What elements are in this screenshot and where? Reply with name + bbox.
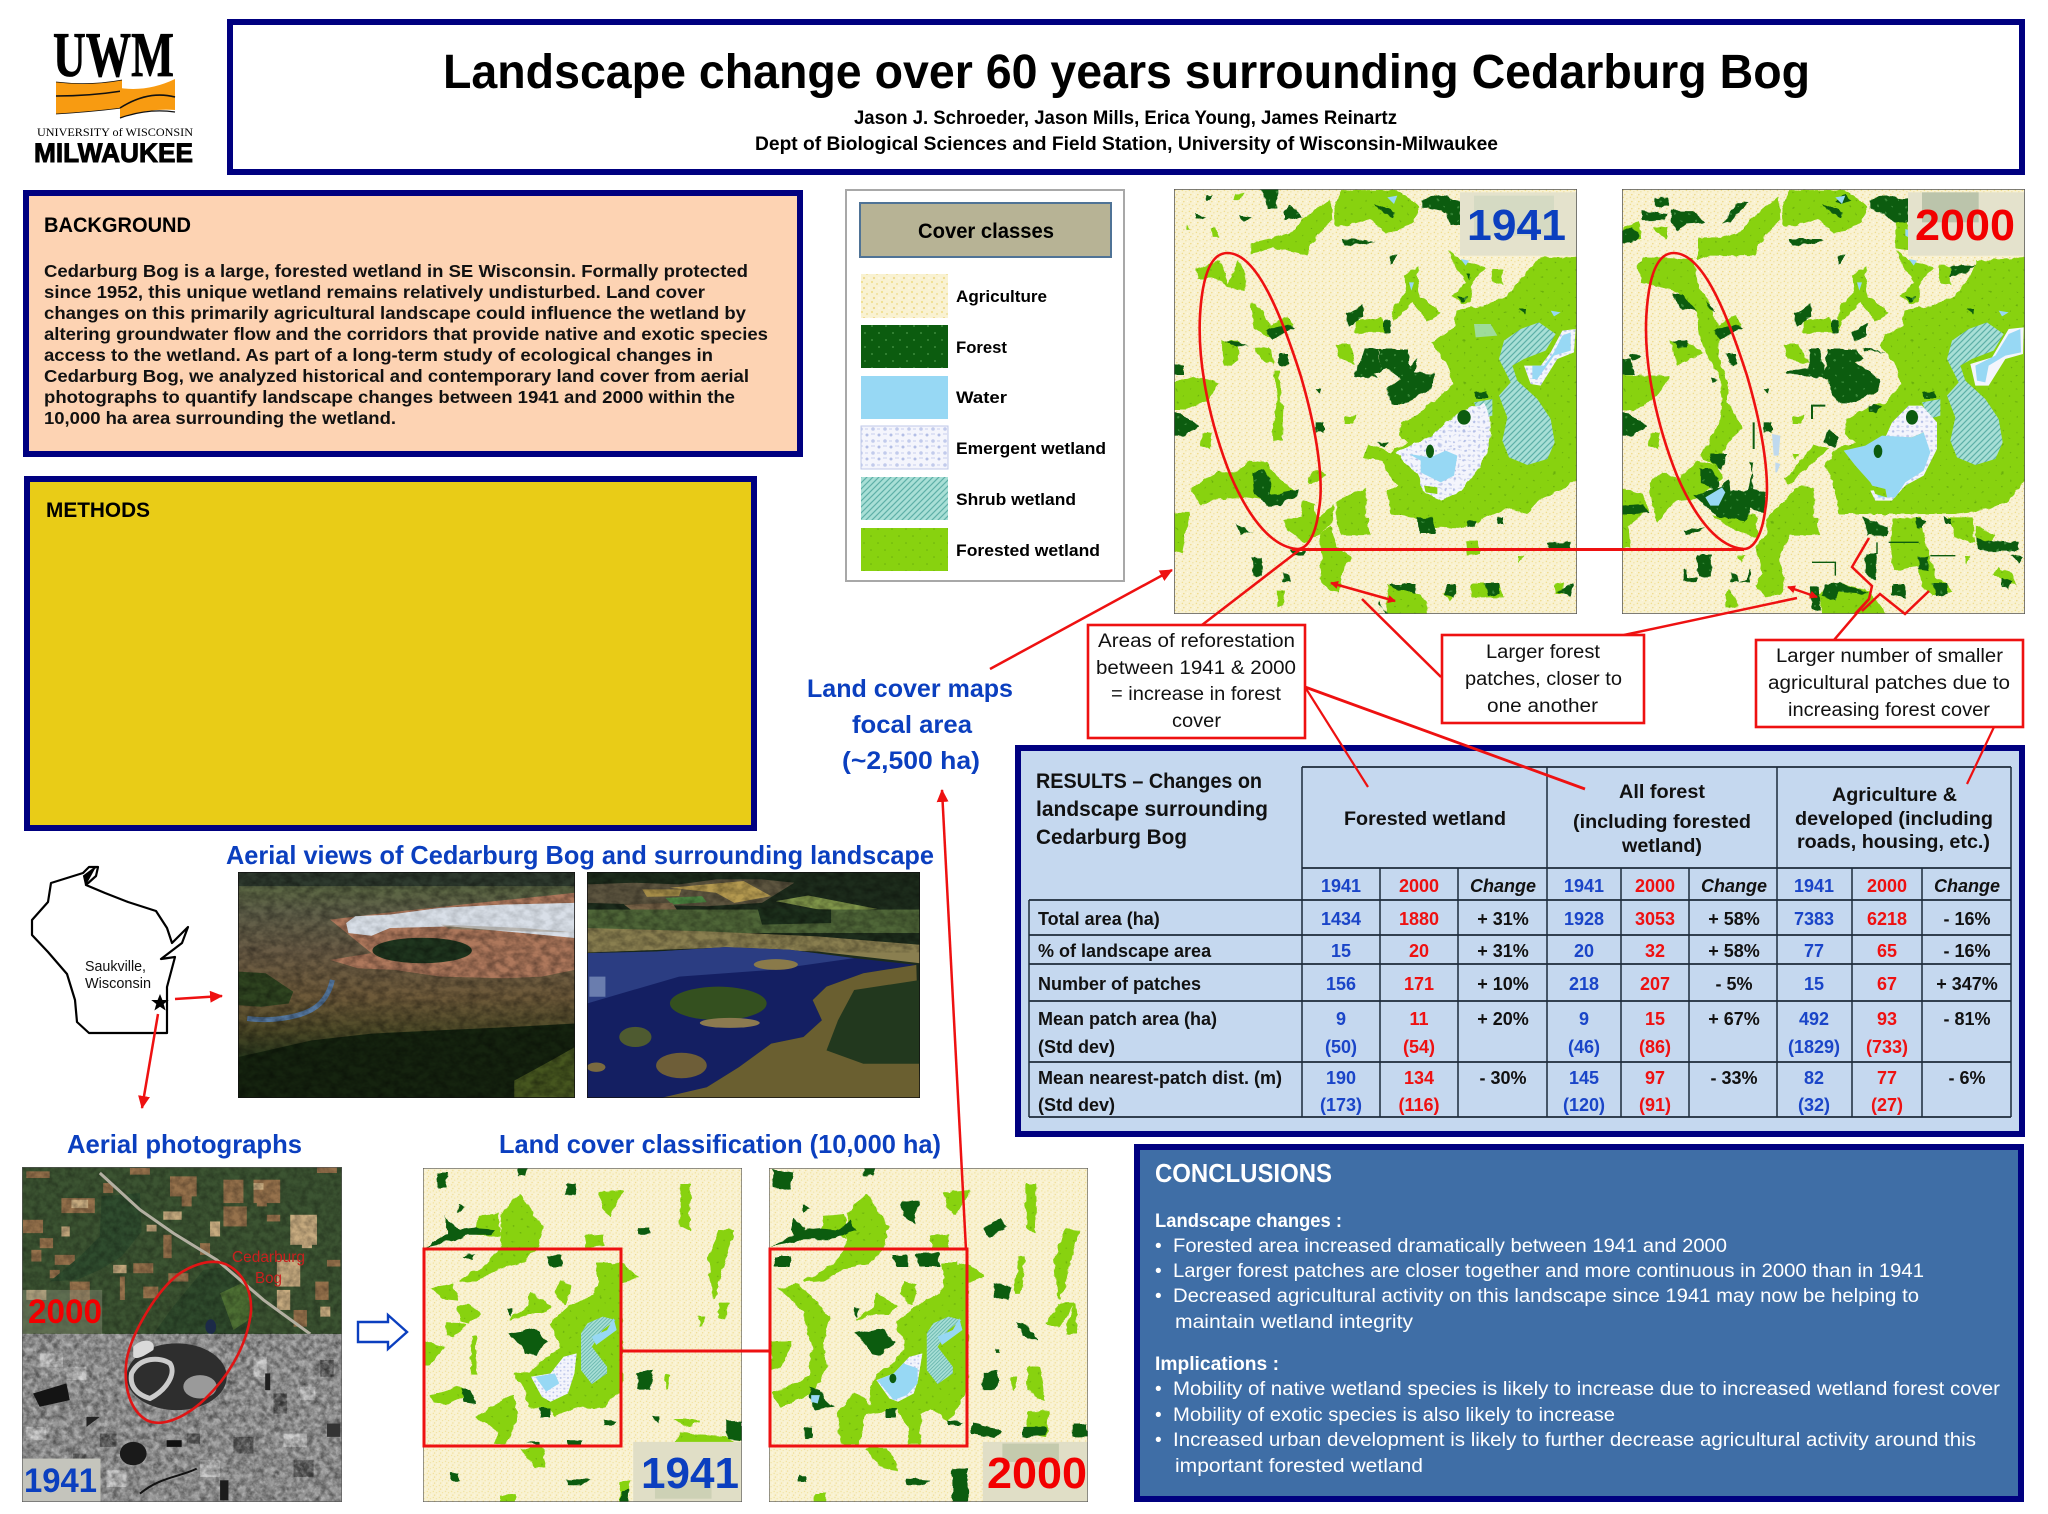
- small map: classification 1941: [423, 1168, 742, 1502]
- leader: forest callout to 1941 map: [1362, 599, 1441, 677]
- map: focal area 2000: [1620, 189, 2027, 616]
- callout: smaller agricultural patches: agricultural patches due to: [1768, 673, 2010, 694]
- row: total area: 1880: [1399, 909, 1439, 929]
- row: percent of landscape: 77: [1804, 941, 1824, 961]
- heading: land cover classification: Land cover classification (10,000 ha): [499, 1129, 941, 1159]
- background body text: photographs to quantify landscape changes between 1941 and 2000 within the: [44, 387, 735, 407]
- row: mean nearest-patch distance: - 33%: [1710, 1068, 1758, 1088]
- row: percent of landscape: 32: [1645, 941, 1665, 961]
- logo: UWM: UNIVERSITY of WISCONSIN: [37, 125, 193, 139]
- Cedarburg Bog label: Cedarburg: [232, 1249, 305, 1266]
- Wisconsin locator map: [32, 867, 188, 1033]
- row: percent of landscape: - 16%: [1943, 941, 1991, 961]
- landscape changes text: •: [1155, 1236, 1162, 1257]
- photo: aerial view 1: [238, 872, 575, 1098]
- affiliation: Dept of Biological Sciences and Field Station, University of Wisconsin-Milwaukee: [755, 134, 1498, 155]
- row: mean patch area: (Std dev): [1038, 1037, 1115, 1057]
- arrow: map to aerial views: [175, 996, 222, 999]
- greyscale 1941 half: [22, 1334, 342, 1502]
- row: mean patch area: 11: [1409, 1009, 1429, 1029]
- year row: 2000: [1635, 876, 1675, 896]
- callout: smaller agricultural patches: increasing forest cover: [1788, 700, 1991, 721]
- swatch: emergent wetland: [861, 426, 1106, 469]
- row: mean nearest-patch distance: (32): [1798, 1095, 1830, 1115]
- year panel: [983, 1442, 1088, 1502]
- authors: Jason J. Schroeder, Jason Mills, Erica Young, James Reinartz: [854, 108, 1397, 129]
- title: Landscape change over 60 years surrounding Cedarburg Bog: [443, 46, 1810, 99]
- landscape changes text: Decreased agricultural activity on this landscape since 1941 may now be helping to: [1173, 1286, 1919, 1307]
- year panel: [22, 1459, 100, 1502]
- row: mean patch area: 9: [1336, 1009, 1346, 1029]
- row: total area: [1038, 909, 1991, 929]
- landscape changes text: [1155, 1211, 1924, 1333]
- callout: larger forest patches: patches, closer to: [1465, 669, 1622, 690]
- Cedarburg Bog label: Bog: [255, 1270, 282, 1287]
- row: number of patches: 171: [1404, 974, 1434, 994]
- column heading: agriculture: Agriculture &: [1832, 785, 1957, 806]
- implications text: Mobility of native wetland species is likely to increase due to increased wetland forest cover: [1173, 1379, 2001, 1400]
- year row: Change: [1934, 876, 2000, 896]
- row: number of patches: 207: [1640, 974, 1670, 994]
- implications text: [1155, 1354, 2001, 1477]
- row: mean nearest-patch distance: 190: [1326, 1068, 1356, 1088]
- table grid: [1029, 767, 2011, 1117]
- year label 1941: 1941: [641, 1449, 739, 1498]
- swatch: shrub wetland: [861, 477, 1076, 520]
- location text: Saukville,: [85, 959, 146, 975]
- implications text: Mobility of exotic species is also likely to increase: [1173, 1405, 1615, 1426]
- row: mean patch area: + 67%: [1708, 1009, 1760, 1029]
- row: mean nearest-patch distance: (Std dev): [1038, 1095, 1115, 1115]
- colour 2000 half: [22, 1166, 342, 1334]
- results heading: landscape surrounding: [1036, 798, 1268, 821]
- row: percent of landscape: 20: [1574, 941, 1594, 961]
- leader: forest callout to 2000 map: [1624, 598, 1797, 635]
- legend title: [860, 203, 1111, 257]
- leader: reforestation callout to ellipse: [1202, 548, 1302, 625]
- year row: Change: [1470, 876, 1536, 896]
- swatch: agriculture: Agriculture: [956, 287, 1047, 306]
- background heading: BACKGROUND: [44, 214, 191, 237]
- Cedarburg Bog label: [232, 1249, 305, 1287]
- landscape changes text: •: [1155, 1261, 1162, 1282]
- row: mean nearest-patch distance: 77: [1877, 1068, 1897, 1088]
- ellipse: reforestation 1941: [1200, 253, 1321, 549]
- year label 1941: 1941: [1467, 201, 1566, 250]
- year panel: [1460, 192, 1577, 256]
- year label 2000: 2000: [987, 1449, 1087, 1498]
- ellipse: reforestation 2000: [1646, 253, 1767, 549]
- aerial label 1941: 1941: [24, 1462, 97, 1500]
- methods heading: METHODS: [46, 499, 150, 522]
- callout: larger forest patches: [1442, 635, 1644, 723]
- year row: [1321, 876, 2000, 896]
- swatch: agriculture: [861, 274, 1047, 318]
- row: mean patch area: (54): [1403, 1037, 1435, 1057]
- heading: aerial photographs: Aerial photographs: [67, 1129, 302, 1159]
- row: mean patch area: 15: [1645, 1009, 1665, 1029]
- results heading: [1036, 770, 1268, 849]
- callout: reforestation: = increase in forest: [1111, 684, 1282, 705]
- row: total area: + 31%: [1477, 909, 1529, 929]
- row: mean nearest-patch distance: (27): [1871, 1095, 1903, 1115]
- row: total area: Total area (ha): [1038, 909, 1160, 929]
- swatch: forest: [861, 325, 1007, 368]
- row: number of patches: + 10%: [1477, 974, 1529, 994]
- row: number of patches: 67: [1877, 974, 1897, 994]
- row: mean nearest-patch distance: (116): [1398, 1095, 1440, 1115]
- background body text: [44, 261, 768, 428]
- bog ellipse: [126, 1262, 251, 1423]
- connector between red squares: [621, 1350, 770, 1352]
- row: number of patches: 218: [1569, 974, 1599, 994]
- swatch: forest: Forest: [956, 338, 1007, 357]
- swatch: forested wetland: Forested wetland: [956, 541, 1100, 560]
- row: mean patch area: - 81%: [1943, 1009, 1991, 1029]
- aerial label 2000: 2000: [28, 1293, 102, 1331]
- year row: 1941: [1321, 876, 1361, 896]
- year row: 1941: [1564, 876, 1604, 896]
- row: total area: 6218: [1867, 909, 1907, 929]
- leader: reforestation to all forest column: [1305, 687, 1585, 789]
- row: mean nearest-patch distance: (173): [1320, 1095, 1362, 1115]
- red focal square 2000: [770, 1249, 967, 1446]
- Wisconsin locator map: Wisconsin: [85, 976, 151, 992]
- row: total area: 7383: [1794, 909, 1834, 929]
- callout: reforestation: cover: [1172, 711, 1222, 732]
- panel: conclusions: [1137, 1147, 2021, 1499]
- row: mean patch area: (46): [1568, 1037, 1600, 1057]
- column heading: agriculture: roads, housing, etc.): [1797, 832, 1990, 853]
- column heading: all forest: (including forested: [1573, 812, 1751, 833]
- row: total area: - 16%: [1943, 909, 1991, 929]
- row: mean patch area: Mean patch area (ha): [1038, 1009, 1217, 1029]
- header panel: [230, 22, 2022, 172]
- row: mean nearest-patch distance: (91): [1639, 1095, 1671, 1115]
- row: number of patches: + 347%: [1936, 974, 1998, 994]
- row: mean patch area: (50): [1325, 1037, 1357, 1057]
- row: mean patch area: 9: [1579, 1009, 1589, 1029]
- implications text: Implications :: [1155, 1354, 1279, 1375]
- row: total area: 1928: [1564, 909, 1604, 929]
- label: land cover maps focal area: [807, 675, 1013, 775]
- arrow: small map to focal label: [942, 790, 966, 1250]
- landscape changes text: Landscape changes :: [1155, 1211, 1342, 1232]
- results heading: RESULTS – Changes on: [1036, 770, 1262, 793]
- landscape changes text: Forested area increased dramatically between 1941 and 2000: [1173, 1236, 1727, 1257]
- panel: results table: [1018, 748, 2022, 1134]
- leader: patches callout to zigzag: [1834, 599, 1869, 640]
- row: mean patch area: 93: [1877, 1009, 1897, 1029]
- landscape changes text: Larger forest patches are closer together and more continuous in 2000 than in 1941: [1173, 1261, 1924, 1282]
- zigzag: agricultural patches: [1852, 538, 1929, 614]
- label: land cover maps focal area: (~2,500 ha): [842, 747, 980, 775]
- callout: larger forest patches: Larger forest: [1486, 642, 1601, 663]
- arrow: label to focal map: [990, 570, 1172, 669]
- map: focal area 1941: [1172, 189, 1579, 616]
- row: percent of landscape: [1038, 941, 1991, 961]
- swatch: emergent wetland: Emergent wetland: [956, 439, 1106, 458]
- year label 2000: 2000: [1915, 201, 2015, 250]
- row: total area: + 58%: [1708, 909, 1760, 929]
- small map: classification 2000: [769, 1168, 1088, 1502]
- background body text: changes on this primarily agricultural landscape could influence the wetland by: [44, 303, 746, 323]
- background body text: 10,000 ha area surrounding the wetland.: [44, 408, 396, 428]
- row: mean nearest-patch distance: 145: [1569, 1068, 1599, 1088]
- year row: 2000: [1867, 876, 1907, 896]
- callout: reforestation: between 1941 & 2000: [1096, 658, 1296, 679]
- label: land cover maps focal area: focal area: [852, 711, 973, 739]
- year panel: [633, 1442, 742, 1502]
- implications text: •: [1155, 1430, 1162, 1451]
- location star: [151, 994, 169, 1010]
- background body text: since 1952, this unique wetland remains relatively undisturbed. Land cover: [44, 282, 705, 302]
- landscape changes text: •: [1155, 1286, 1162, 1307]
- year panel: [1908, 192, 2025, 256]
- results heading: Cedarburg Bog: [1036, 826, 1187, 849]
- row: percent of landscape: + 58%: [1708, 941, 1760, 961]
- row: mean patch area: 492: [1799, 1009, 1829, 1029]
- background body text: Cedarburg Bog is a large, forested wetland in SE Wisconsin. Formally protected: [44, 261, 748, 281]
- row: total area: 3053: [1635, 909, 1675, 929]
- implications text: important forested wetland: [1175, 1456, 1423, 1477]
- logo: UWM: [34, 19, 193, 168]
- callout: smaller agricultural patches: Larger number of smaller: [1776, 646, 2004, 667]
- leader: patches to agriculture column: [1967, 727, 1994, 784]
- year row: 1941: [1794, 876, 1834, 896]
- row: percent of landscape: + 31%: [1477, 941, 1529, 961]
- row: number of patches: - 5%: [1715, 974, 1753, 994]
- background body text: access to the wetland. As part of a long-term study of ecological changes in: [44, 345, 713, 365]
- row: mean nearest-patch distance: Mean nearest-patch dist. (m): [1038, 1068, 1282, 1088]
- background body text: altering groundwater flow and the corridors that provide native and exotic species: [44, 324, 768, 344]
- double arrow: forest patches 1941: [1331, 583, 1395, 601]
- row: mean nearest-patch distance: - 30%: [1479, 1068, 1527, 1088]
- connector: ellipses: [1292, 548, 1744, 551]
- legend: cover classes: [846, 190, 1124, 581]
- column heading: agriculture: [1795, 785, 1993, 853]
- callout: reforestation: [1088, 625, 1305, 738]
- panel: methods: [27, 479, 754, 828]
- implications text: Increased urban development is likely to further decrease agricultural activity around this: [1173, 1430, 1976, 1451]
- leader: reforestation to forested wetland column: [1305, 687, 1368, 787]
- column heading: agriculture: developed (including: [1795, 809, 1993, 830]
- red focal square 1941: [424, 1249, 621, 1446]
- row: percent of landscape: 15: [1331, 941, 1351, 961]
- year row: 2000: [1399, 876, 1439, 896]
- row: mean patch area: (86): [1639, 1037, 1671, 1057]
- aerial photograph composite: [22, 1166, 342, 1502]
- logo: UWM: UWM: [53, 19, 174, 90]
- arrow: map to aerial photographs: [142, 1014, 158, 1108]
- row: mean nearest-patch distance: 134: [1404, 1068, 1434, 1088]
- legend title: Cover classes: [918, 220, 1054, 243]
- swatch: water: Water: [956, 388, 1007, 407]
- swatch: shrub wetland: Shrub wetland: [956, 490, 1076, 509]
- row: percent of landscape: % of landscape area: [1038, 941, 1212, 961]
- row: number of patches: 156: [1326, 974, 1356, 994]
- column heading: all forest: All forest: [1619, 782, 1706, 803]
- swatch: water: [861, 376, 1007, 419]
- row: mean patch area: (733): [1866, 1037, 1908, 1057]
- callout: smaller agricultural patches: [1756, 640, 2023, 727]
- double arrow: forest patches 2000: [1788, 587, 1817, 597]
- row: mean nearest-patch distance: - 6%: [1948, 1068, 1986, 1088]
- row: number of patches: Number of patches: [1038, 974, 1201, 994]
- photo: aerial view 2: [587, 872, 920, 1098]
- row: percent of landscape: 65: [1877, 941, 1897, 961]
- swatch: forested wetland: [861, 528, 1100, 571]
- row: mean patch area: (1829): [1788, 1037, 1840, 1057]
- implications text: •: [1155, 1405, 1162, 1426]
- annotation lines and arrows: [942, 538, 1994, 1250]
- row: percent of landscape: 20: [1409, 941, 1429, 961]
- row: total area: 1434: [1321, 909, 1361, 929]
- row: mean patch area: + 20%: [1477, 1009, 1529, 1029]
- implications text: •: [1155, 1379, 1162, 1400]
- heading: aerial views: Aerial views of Cedarburg Bog and surrounding landscape: [226, 840, 934, 870]
- conclusions heading: CONCLUSIONS: [1155, 1158, 1332, 1188]
- panel: background: [26, 193, 800, 454]
- row: number of patches: [1038, 974, 1998, 994]
- callout: reforestation: Areas of reforestation: [1098, 631, 1295, 652]
- row: mean patch area: [1038, 1009, 1991, 1057]
- column heading: all forest: [1573, 782, 1751, 857]
- logo: UWM: MILWAUKEE: [34, 138, 193, 168]
- column heading: all forest: wetland): [1621, 836, 1702, 857]
- row: mean nearest-patch distance: [1038, 1068, 1986, 1115]
- row: mean nearest-patch distance: (120): [1563, 1095, 1605, 1115]
- row: mean nearest-patch distance: 82: [1804, 1068, 1824, 1088]
- year row: Change: [1701, 876, 1767, 896]
- landscape changes text: maintain wetland integrity: [1175, 1312, 1414, 1333]
- row: number of patches: 15: [1804, 974, 1824, 994]
- column heading: forested wetland: Forested wetland: [1344, 809, 1506, 830]
- callout: larger forest patches: one another: [1487, 696, 1599, 717]
- arrow: block arrow to classification: [358, 1315, 407, 1349]
- background body text: Cedarburg Bog, we analyzed historical and contemporary land cover from aerial: [44, 366, 749, 386]
- row: mean nearest-patch distance: 97: [1645, 1068, 1665, 1088]
- label: land cover maps focal area: Land cover maps: [807, 675, 1013, 703]
